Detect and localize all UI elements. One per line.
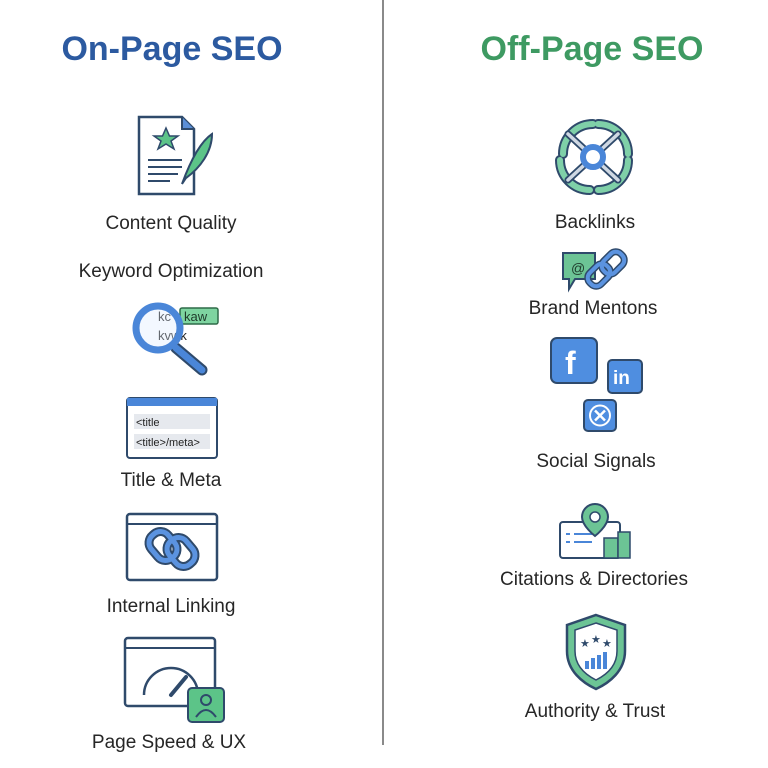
icon: brand mentions: @ xyxy=(571,260,585,276)
icon: brand mentions xyxy=(562,248,628,292)
icon: page speed xyxy=(124,636,225,723)
icon: content quality document xyxy=(138,116,213,196)
icon: magnifier: kaw xyxy=(184,309,208,324)
icon: social signals xyxy=(550,337,643,432)
label: authority & trust: Authority & Trust xyxy=(525,701,665,722)
label: internal linking: Internal Linking xyxy=(107,596,235,617)
icon: internal linking window xyxy=(126,512,218,582)
label: keyword optimization: Keyword Optimization xyxy=(79,261,263,282)
icon: magnifier xyxy=(132,302,219,376)
title: off-page: Off-Page SEO xyxy=(481,30,703,68)
icon: authority shield: ★ xyxy=(580,637,590,650)
divider xyxy=(382,0,384,745)
icon: citations xyxy=(559,503,631,559)
icon: backlinks xyxy=(555,119,633,195)
icon: authority shield: ★ xyxy=(591,633,601,646)
label: page speed & ux: Page Speed & UX xyxy=(92,732,246,753)
icon: social signals: in xyxy=(613,368,630,389)
icon: magnifier: kc xyxy=(158,309,172,324)
label: content quality: Content Quality xyxy=(106,213,236,234)
title: on-page: On-Page SEO xyxy=(61,30,283,68)
label: backlinks: Backlinks xyxy=(555,212,635,233)
label: title & meta: Title & Meta xyxy=(121,470,221,491)
icon: authority shield xyxy=(566,614,626,690)
icon: title meta window: <title xyxy=(136,417,160,429)
icon: magnifier: kvwk xyxy=(158,328,187,343)
label: brand mentions: Brand Mentons xyxy=(529,298,657,319)
icon: authority shield: ★ xyxy=(602,637,612,650)
icon: title meta window xyxy=(126,397,218,459)
label: citations & directories: Citations & Directories xyxy=(500,569,688,590)
icon: social signals: f xyxy=(565,345,576,381)
label: social signals: Social Signals xyxy=(536,451,656,472)
icon: title meta window: <title>/meta> xyxy=(136,437,200,449)
